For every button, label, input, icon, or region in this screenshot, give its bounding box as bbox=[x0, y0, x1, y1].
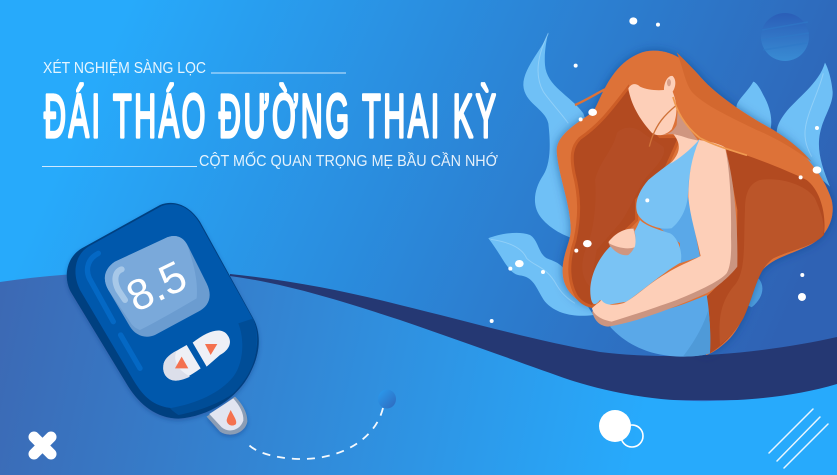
test strip bbox=[207, 397, 247, 435]
sparkles bbox=[490, 17, 821, 323]
neck bbox=[670, 134, 698, 164]
hair shadow right bbox=[707, 148, 825, 353]
eyebrow text: XÉT NGHIỆM SÀNG LỌC bbox=[43, 58, 206, 77]
leaves bbox=[488, 32, 833, 316]
icon: diagonal lines bbox=[769, 409, 828, 468]
title block bbox=[42, 58, 498, 170]
icon: circles bbox=[599, 410, 643, 447]
dress bbox=[590, 139, 710, 357]
face bbox=[628, 76, 676, 135]
screen reading: 8.5 bbox=[119, 252, 194, 322]
title block: CỘT MỐC QUAN TRỌNG MẸ BẦU CẦN NHỚ bbox=[199, 150, 498, 170]
subtitle bbox=[42, 166, 197, 167]
planet bbox=[761, 13, 809, 61]
illustration: pregnant woman bbox=[488, 17, 833, 357]
ear and hair strands bbox=[575, 79, 747, 155]
wave: navy band bbox=[230, 274, 837, 400]
darker upper hair band bbox=[677, 52, 812, 162]
body highlights bbox=[87, 253, 113, 322]
buttons bbox=[163, 331, 230, 381]
main title: ĐÁI THÁO ĐƯỜNG THAI KỲ bbox=[44, 83, 496, 151]
icon: glucose meter bbox=[67, 203, 259, 435]
arm bbox=[592, 140, 737, 327]
icon: x mark bbox=[34, 437, 51, 454]
hair bbox=[557, 51, 833, 355]
hand on belly bbox=[609, 228, 636, 255]
hair shadow left bbox=[570, 87, 680, 307]
dashed connector bbox=[246, 408, 383, 459]
connector ball bbox=[378, 390, 396, 408]
screen bbox=[105, 236, 210, 337]
wave: lower blue area bbox=[0, 272, 837, 475]
meter body bbox=[67, 203, 259, 419]
